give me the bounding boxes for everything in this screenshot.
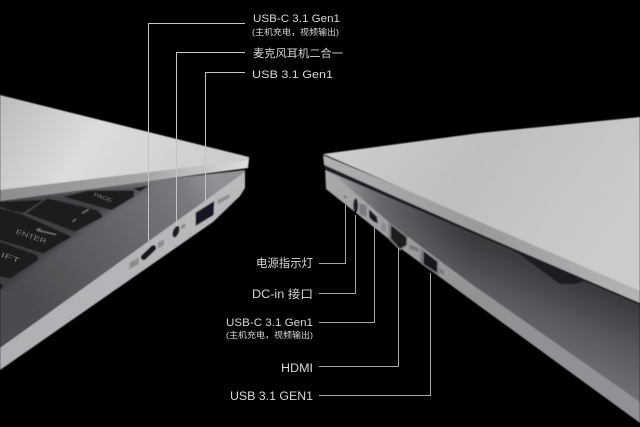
port: label plate bbox=[359, 203, 367, 217]
port: USB icon bbox=[439, 268, 444, 275]
leader: mic bbox=[176, 52, 245, 226]
leader: USB left bbox=[206, 72, 245, 202]
port: D icon bbox=[381, 222, 386, 233]
leader: DC-in bbox=[319, 215, 356, 294]
left laptop side strip bbox=[0, 172, 245, 370]
left laptop key well shade bbox=[0, 186, 150, 292]
right laptop deck bbox=[325, 168, 640, 407]
leader: USB-C right bbox=[319, 227, 374, 322]
label: USB-C right: USB-C 3.1 Gen1 bbox=[226, 317, 313, 329]
right laptop side strip bbox=[325, 168, 640, 423]
label: USB-C left note: (主机充电，视频输出) bbox=[252, 27, 339, 37]
port: power indicator bbox=[344, 196, 346, 198]
label: mic: 麦克风耳机二合一 bbox=[253, 46, 343, 60]
label: USB-C right note: (主机充电，视频输出) bbox=[226, 330, 313, 340]
labels: right laptop bbox=[226, 256, 313, 403]
right laptop ports bbox=[344, 196, 444, 276]
port: DC-in bbox=[353, 198, 358, 213]
left laptop lid edge bbox=[0, 159, 249, 201]
left laptop keyboard deck bbox=[0, 170, 245, 350]
right laptop hinge bbox=[510, 247, 587, 284]
port labels bbox=[129, 194, 230, 269]
labels: left laptop bbox=[252, 13, 343, 81]
leader: HDMI bbox=[319, 248, 398, 366]
right laptop gap shadow bbox=[325, 166, 640, 305]
left laptop ports bbox=[129, 194, 230, 269]
key label: PAGE: PAGE bbox=[93, 192, 113, 204]
right laptop lid bbox=[323, 117, 640, 291]
port: USB-C bbox=[369, 209, 378, 223]
right laptop lid edge bbox=[323, 155, 640, 303]
key label: ENTER: ENTER bbox=[15, 229, 47, 246]
key label: SHIFT: IFT bbox=[0, 252, 21, 265]
label: HDMI: HDMI bbox=[281, 363, 313, 375]
right laptop deck left fade bbox=[325, 168, 470, 282]
port: USB-C bbox=[144, 248, 153, 257]
port: audio jack bbox=[171, 225, 181, 238]
port: USB-A bbox=[196, 201, 214, 226]
label: DC-in: DC-in 接口 bbox=[252, 288, 313, 301]
callout leader lines bbox=[148, 24, 430, 396]
port: HDMI bbox=[389, 223, 407, 251]
port: USB-A bbox=[420, 248, 439, 276]
left laptop lid bbox=[0, 95, 249, 190]
leader: power indicator bbox=[319, 205, 346, 264]
port: HDMI label bbox=[409, 245, 419, 252]
left laptop bbox=[0, 95, 249, 370]
left laptop key labels bbox=[0, 192, 113, 265]
label: USB right: USB 3.1 GEN1 bbox=[230, 391, 313, 403]
label: power indicator: 电源指示灯 bbox=[256, 256, 313, 270]
label: USB-C left: USB-C 3.1 Gen1 bbox=[253, 13, 340, 25]
label: USB left: USB 3.1 Gen1 bbox=[252, 69, 333, 81]
left laptop keys bbox=[0, 185, 150, 291]
leader: USB-C left bbox=[148, 24, 245, 241]
left laptop key symbols bbox=[37, 209, 89, 235]
leader: USB right bbox=[319, 273, 430, 396]
right laptop bbox=[323, 117, 640, 423]
